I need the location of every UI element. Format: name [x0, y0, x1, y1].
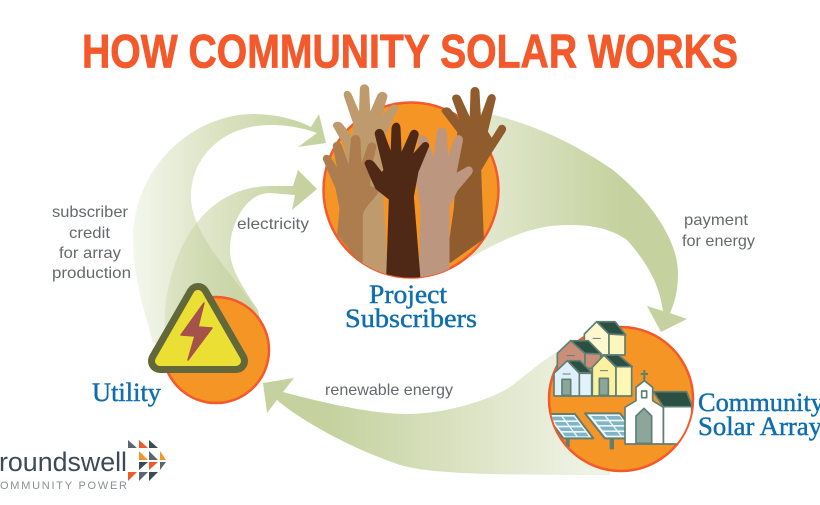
arrow: renewable energy from array to utility [263, 330, 610, 475]
icon: houses, church and solar panels [545, 322, 692, 449]
label: subscriber credit for array production: for array [59, 245, 121, 262]
circle: subscribers [324, 102, 498, 278]
icon: lightning bolt [181, 303, 212, 360]
logo wordmark: roundswell [0, 447, 127, 477]
house: blue [554, 361, 592, 396]
label: project subscribers [345, 280, 477, 333]
church [625, 370, 692, 444]
label: subscriber credit for array production: subscriber [52, 204, 129, 221]
label: renewable energy: renewable energy [325, 382, 453, 399]
solar panel: right [584, 412, 624, 450]
house: brick [557, 341, 601, 370]
label: community solar array: Community [698, 388, 820, 417]
solar panel: left [545, 414, 593, 447]
logo mark: chevron of triangles [128, 440, 166, 481]
logo tagline: OMMUNITY POWER [0, 480, 127, 492]
label: payment for energy [682, 212, 755, 250]
label: community solar array: Solar Array [698, 412, 820, 441]
hand: medium brown [324, 136, 378, 263]
hand: dark brown [366, 124, 428, 278]
logo: groundswell community power [0, 440, 166, 492]
label: project subscribers: Project [369, 280, 448, 309]
hand: brown front right [443, 88, 505, 262]
hand: taupe [413, 129, 472, 278]
label: subscriber credit for array production: credit [69, 225, 111, 242]
label: subscriber credit for array production: production [52, 265, 131, 282]
panel: community solar array [545, 322, 820, 471]
label: project subscribers: Subscribers [345, 304, 477, 333]
arrow: subscriber credit from utility to subscribers [133, 114, 326, 345]
arrow: electricity from utility to subscribers [165, 170, 317, 340]
label: electricity: electricity [237, 216, 309, 233]
panel: project subscribers [324, 85, 505, 333]
label: community solar array [698, 388, 820, 441]
circle: array [549, 327, 693, 471]
house: cream [584, 322, 626, 355]
label: subscriber credit for array production [52, 204, 131, 282]
panel: utility [92, 295, 269, 407]
label: payment for energy: payment [684, 212, 749, 229]
icon: raised hands [324, 85, 505, 278]
label: payment for energy: for energy [682, 233, 755, 250]
icon: warning triangle [160, 295, 236, 361]
house: yellow [592, 355, 632, 396]
arrow: payment for energy from subscribers to array [470, 110, 687, 332]
circle: utility [163, 297, 269, 403]
hand: light tan [334, 85, 397, 278]
label: utility: Utility [92, 378, 161, 407]
